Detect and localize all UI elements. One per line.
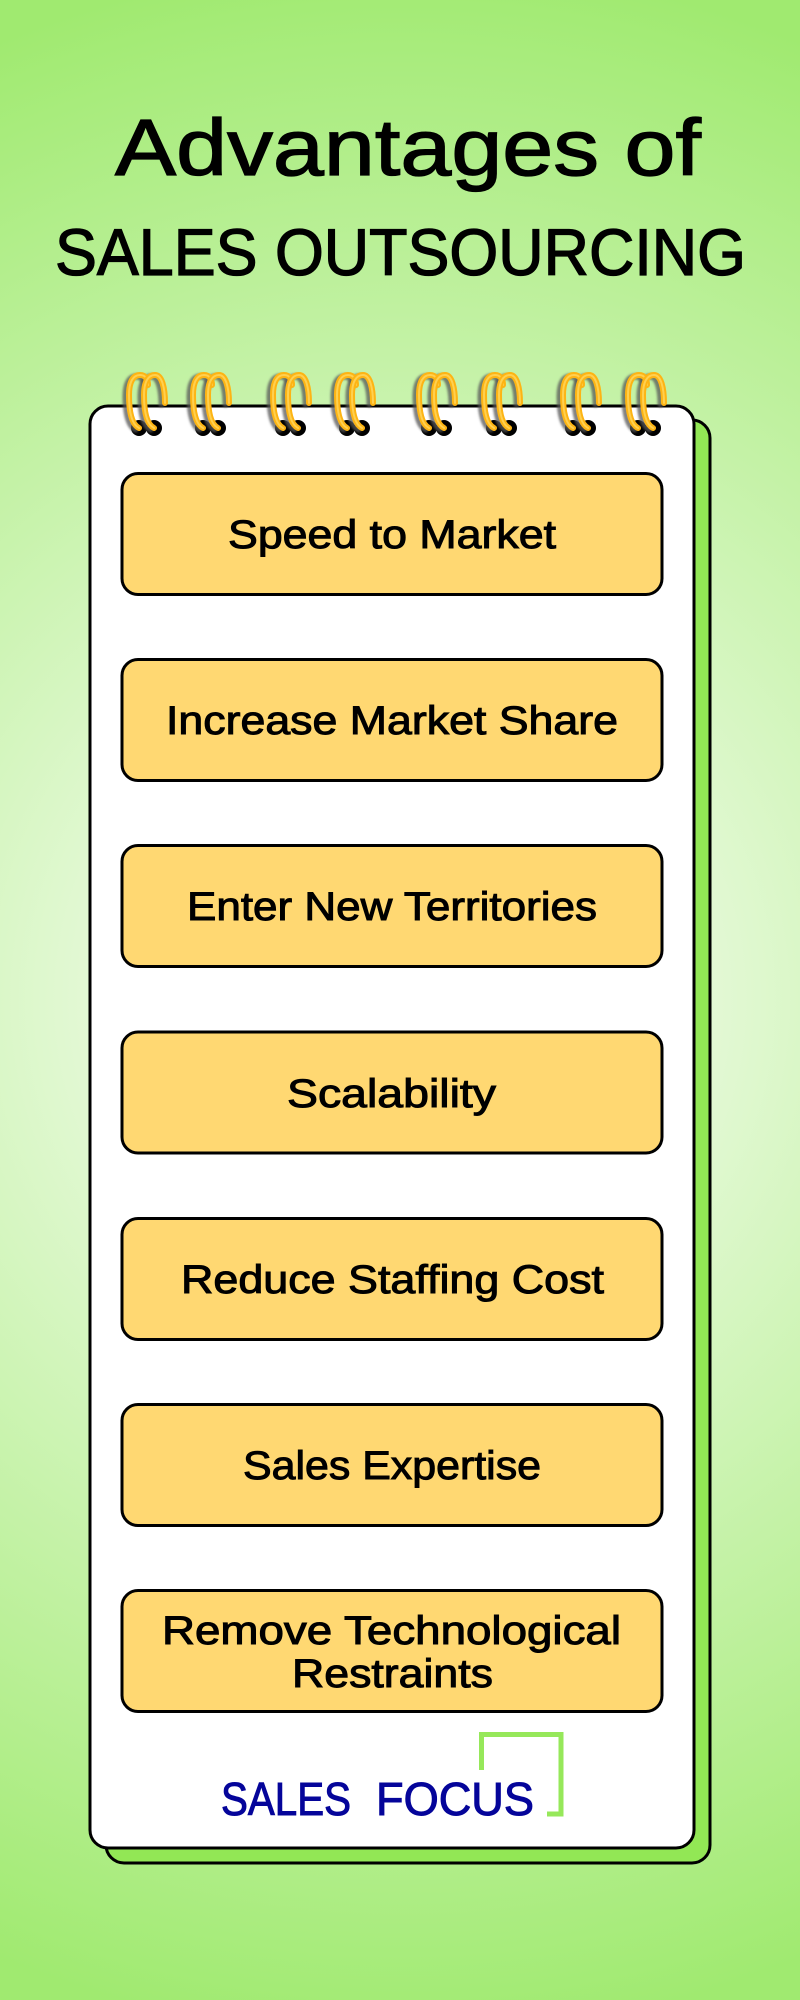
item: Enter New Territories: Enter New Territories [187, 885, 597, 929]
logo wordmark SALES: SALES [221, 1773, 351, 1825]
logo bracket [482, 1734, 561, 1814]
item: Reduce Staffing Cost [122, 1218, 662, 1340]
item: Scalability: Scalability [287, 1072, 496, 1116]
item: Enter New Territories [122, 846, 662, 966]
item: Reduce Staffing Cost: Reduce Staffing Cost [181, 1258, 604, 1302]
notebook front page [90, 406, 694, 1848]
item: Remove Technological Restraints [122, 1590, 662, 1712]
item: Increase Market Share: Increase Market Share [166, 699, 618, 743]
item: Scalability [122, 1032, 662, 1153]
item: Sales Expertise [122, 1404, 662, 1526]
spiral binding rings [126, 375, 664, 436]
item: Remove Technological Restraints: Remove Technological [162, 1609, 621, 1653]
logo: Sales Focus [221, 1734, 561, 1825]
logo wordmark FOCUS: FOCUS [376, 1773, 534, 1825]
notebook back page [106, 420, 710, 1863]
panel: notebook [90, 375, 710, 1863]
item: Speed to Market [122, 474, 662, 594]
item: Increase Market Share [122, 660, 662, 780]
item: Sales Expertise: Sales Expertise [243, 1444, 541, 1488]
title line 1: Advantages of [115, 103, 702, 192]
item: Remove Technological Restraints: Restraints [292, 1652, 493, 1696]
title line 2: SALES OUTSOURCING [55, 215, 746, 289]
item: Speed to Market: Speed to Market [228, 513, 556, 557]
title [55, 103, 746, 289]
